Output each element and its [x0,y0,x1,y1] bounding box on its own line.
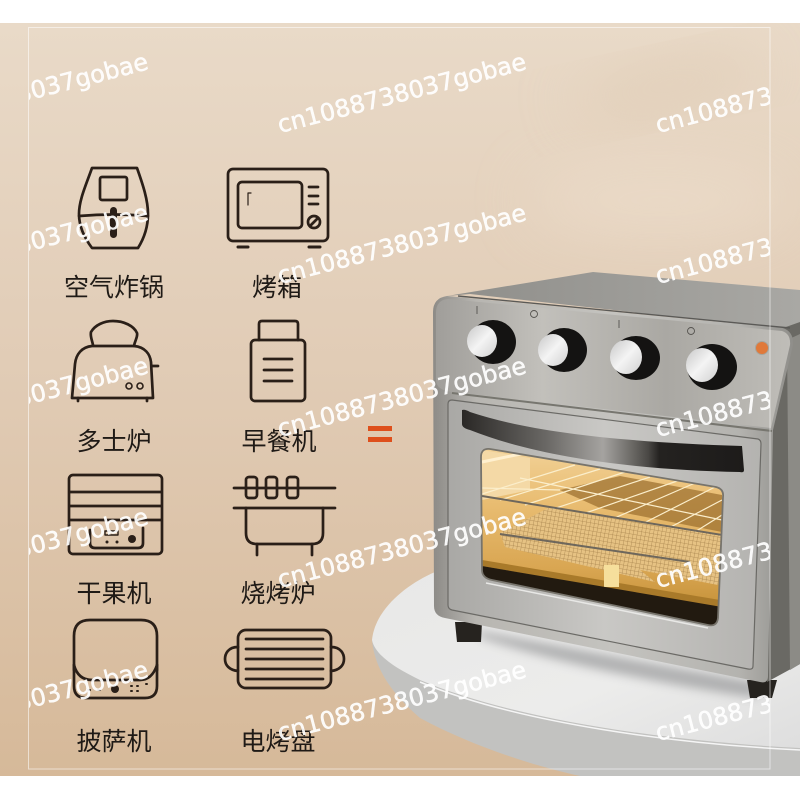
label: air fryer: 空气炸锅 [64,274,164,302]
door handle [462,410,744,472]
oven side panel [767,322,800,682]
watermarks: cn1088738037gobae [274,503,529,594]
oven window [482,450,722,624]
equals sign [368,426,392,442]
oven front body [433,296,793,682]
knob: function [538,328,587,372]
label: oven box: 烤箱 [252,274,302,302]
icon: dehydrator [69,475,162,554]
oven floor shadow [482,566,718,624]
label: electric grill pan: 电烤盘 [240,728,316,756]
icon: air fryer [79,168,148,248]
label: toaster: 多士炉 [76,428,152,456]
knob: temperature 2 [610,336,660,380]
icon: barbecue grill [234,477,335,555]
power light [756,342,768,354]
knob: temperature [467,320,516,364]
control panel [436,299,790,428]
icon: oven box [228,169,328,247]
oven feet [455,622,777,698]
label: barbecue grill: 烧烤炉 [240,580,316,608]
round table [372,572,800,776]
knob: timer [686,344,737,390]
icon: electric grill pan [225,630,344,688]
label: dehydrator: 干果机 [76,580,152,608]
wire mesh basket [500,508,722,585]
icon: pizza machine [74,620,157,698]
watermarks: cn1088738037gobae [274,352,529,443]
label: pizza machine: 披萨机 [76,728,152,756]
air fryer oven illustration [433,272,800,698]
watermarks: cn1088738037gobae [274,48,529,139]
label: breakfast machine: 早餐机 [241,428,317,456]
oven door [448,400,761,669]
panel icons [477,306,694,334]
upper wire rack [560,476,722,532]
icon: breakfast machine [251,321,305,401]
watermarks: cn1088738037gobae [274,656,529,747]
icon: toaster [72,321,158,401]
watermarks: cn1088738037gobae [274,199,529,290]
oven top surface [447,272,800,329]
